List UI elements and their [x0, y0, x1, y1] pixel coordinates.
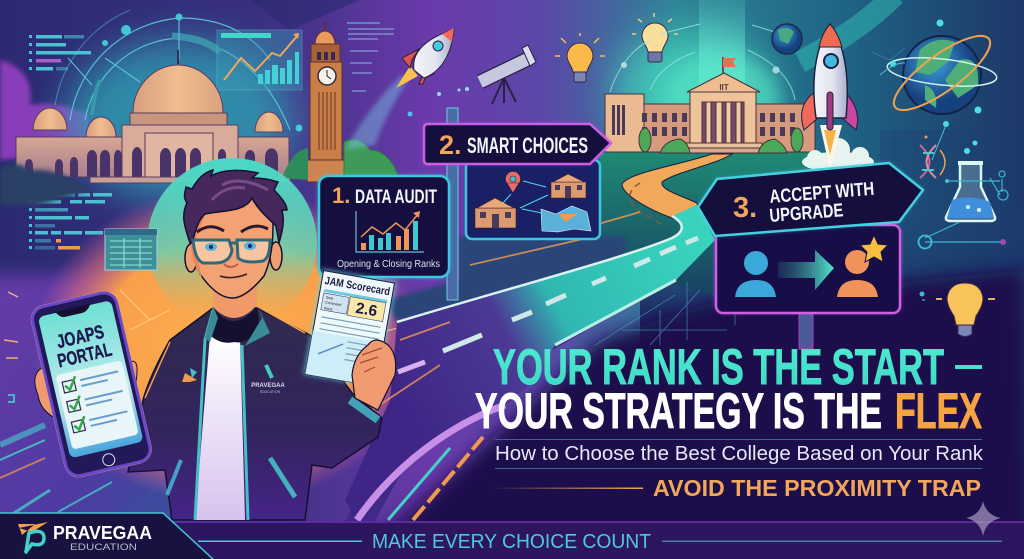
text: make every choice count: MAKE EVERY CHOICE COUNT	[372, 531, 651, 553]
light bulb lower right	[936, 283, 995, 336]
grid lines beneath sign three	[595, 282, 735, 345]
text: scorecard title: JAM Scorecard	[324, 275, 391, 298]
JAM scorecard: Seat	[326, 295, 334, 301]
jacket and body: PRAVEGAA	[251, 383, 285, 389]
body panel	[715, 225, 901, 313]
text: step number: 1.	[332, 183, 350, 208]
icon: hair	[184, 170, 287, 243]
student character	[128, 170, 382, 520]
flask	[946, 140, 995, 221]
small rocket with trail	[345, 28, 454, 150]
logo panel	[0, 513, 213, 559]
text: step number: 3.	[733, 192, 757, 224]
text: heading: DATA AUDIT	[355, 187, 437, 208]
phone JOAPS portal	[29, 289, 154, 479]
jacket and body	[128, 306, 382, 520]
text: caption: Opening & Closing Ranks	[337, 258, 440, 270]
subtitle: How to Choose the Best College Based on Your Rank	[495, 442, 984, 465]
teal circle behind head	[147, 158, 317, 328]
chart: ranks	[356, 211, 424, 252]
JAM scorecard: 2.6	[354, 300, 379, 320]
sign 3: accept with upgrade	[698, 163, 923, 313]
sign 2: smart choices	[424, 124, 611, 239]
bottom banner	[0, 501, 1024, 559]
text: step number: 2.	[439, 130, 462, 160]
text: phone title: JOAPS	[55, 322, 106, 353]
neck	[213, 270, 257, 318]
left side light streaks	[0, 292, 112, 522]
sign posts	[447, 108, 813, 349]
small globe	[772, 24, 802, 54]
logo panel: EDUCATION	[70, 542, 137, 552]
header hexagon	[698, 163, 923, 236]
chart panel above mosque	[217, 30, 302, 90]
icon: logo	[18, 522, 48, 553]
right data text	[347, 22, 394, 92]
JAM scorecard: Command	[325, 300, 342, 307]
right globe with orbit	[872, 20, 1000, 160]
warm glow behind student	[33, 185, 423, 505]
light bulb left	[555, 33, 605, 82]
icon: arrow	[778, 250, 834, 290]
icon: sparkle	[966, 501, 1001, 536]
data table window	[105, 229, 157, 270]
phone holding left hand	[35, 361, 137, 418]
icon: upgraded person	[837, 235, 888, 297]
header hexagon: UPGRADE	[769, 200, 844, 227]
main title	[475, 339, 982, 439]
text: brand: PRAVEGAA	[53, 523, 152, 543]
icon: glasses	[193, 240, 270, 263]
ground	[385, 152, 900, 322]
icon: person	[735, 251, 776, 297]
winding road	[345, 154, 732, 520]
mosque building	[16, 50, 290, 183]
phone JOAPS portal: PORTAL	[56, 340, 114, 372]
left foliage	[0, 164, 92, 205]
body panel	[466, 160, 600, 239]
jacket and body: EDUCATION	[260, 390, 281, 394]
arcs behind IIT building	[610, 24, 795, 100]
text: heading: ACCEPT WITH	[769, 179, 875, 208]
header arrow	[424, 124, 611, 164]
green bush	[282, 140, 400, 180]
molecule network	[918, 171, 1008, 300]
JAM scorecard: Rank	[324, 306, 333, 312]
telescope	[408, 45, 536, 116]
head	[184, 170, 287, 298]
light beam	[662, 0, 782, 145]
right hand holding scorecard	[352, 340, 396, 410]
DNA helix	[920, 136, 945, 178]
sign 1: data audit	[318, 175, 450, 278]
tagline: avoid the proximity trap: AVOID THE PROXIMITY TRAP	[653, 475, 981, 501]
text: heading: SMART CHOICES	[467, 133, 588, 158]
left code snippets	[29, 35, 112, 250]
big rocket	[802, 24, 874, 172]
main title: FLEX	[895, 383, 982, 439]
tech arcs and nodes behind mosque	[55, 10, 302, 132]
IIT building: IIT	[719, 83, 729, 92]
light bulb right	[632, 13, 678, 62]
IIT building	[605, 57, 815, 153]
clock tower	[307, 22, 344, 182]
JAM scorecard	[303, 268, 397, 388]
